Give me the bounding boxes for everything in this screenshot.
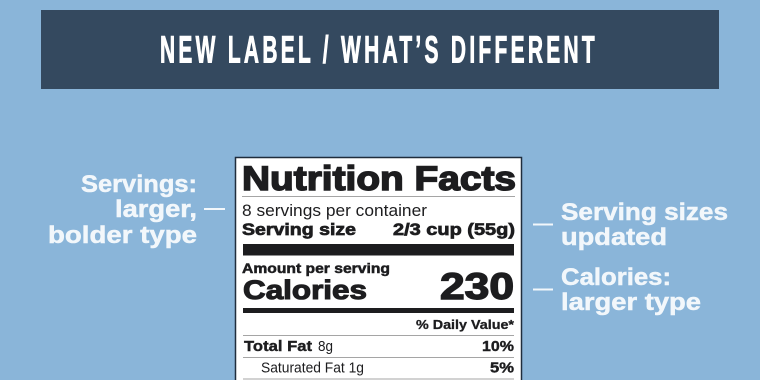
serving size row: 2/3 cup (55g) bbox=[393, 221, 515, 239]
callout: servings bbox=[48, 171, 225, 249]
servings per container: 8 servings per container bbox=[242, 202, 428, 220]
calories row bbox=[243, 266, 514, 307]
callout: servings: bolder type bbox=[48, 222, 197, 249]
callout: calories: Calories: bbox=[561, 264, 671, 291]
total fat row bbox=[244, 339, 514, 355]
callout: calories bbox=[533, 264, 701, 316]
callout: serving sizes: updated bbox=[561, 224, 667, 251]
daily value header: % Daily Value* bbox=[416, 318, 514, 332]
serving size row bbox=[242, 221, 515, 239]
calories row: 230 bbox=[440, 266, 514, 307]
total fat row: 8g bbox=[318, 339, 333, 355]
calories row: Calories bbox=[243, 275, 367, 305]
serving size row: Serving size bbox=[242, 221, 356, 239]
total fat row: 10% bbox=[482, 339, 514, 355]
callout: calories: larger type bbox=[561, 289, 701, 316]
saturated fat row: 5% bbox=[490, 360, 514, 376]
callout: servings: larger, bbox=[115, 196, 197, 223]
callout: serving sizes bbox=[533, 199, 728, 251]
saturated fat row bbox=[261, 360, 514, 376]
title banner bbox=[41, 10, 719, 89]
label heading: Nutrition Facts bbox=[242, 160, 516, 198]
total fat row: Total Fat bbox=[244, 339, 312, 355]
saturated fat row: Saturated Fat 1g bbox=[261, 360, 364, 376]
callout: serving sizes: Serving sizes bbox=[561, 199, 728, 226]
nutrition facts label bbox=[236, 158, 522, 380]
amount per serving: Amount per serving bbox=[242, 261, 390, 276]
callout: servings: Servings: bbox=[81, 171, 197, 198]
